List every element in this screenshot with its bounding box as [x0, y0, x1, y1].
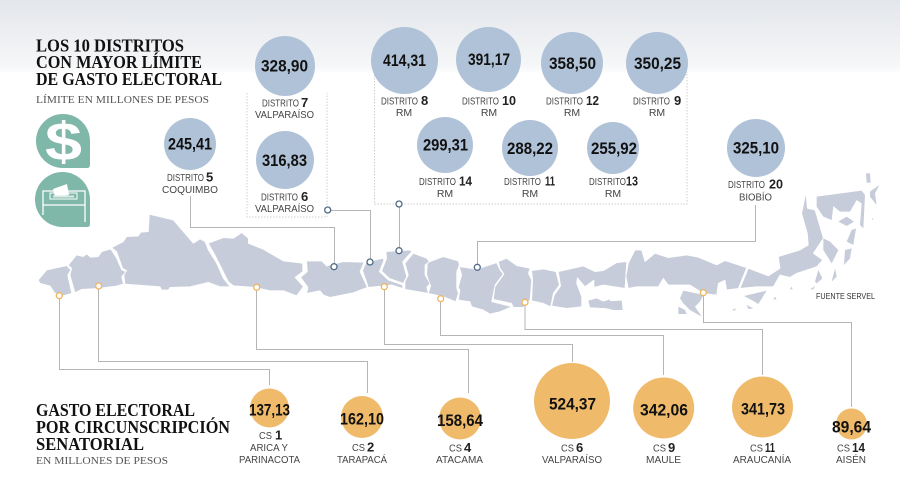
bubble: CS 11 [732, 376, 793, 466]
icon: dollar: $ [45, 112, 82, 172]
bubble: CS 9: MAULE [646, 454, 681, 466]
bubble: CS 4: 158,64 [437, 411, 483, 430]
bubble: district 14: 14 [459, 174, 473, 188]
bubble: district 20: BIOBÍO [739, 190, 772, 204]
bubble: CS 14: 89,64 [832, 418, 871, 436]
title: top [36, 36, 222, 89]
bubble: CS 2: CS [352, 442, 365, 454]
title: bottom: POR CIRCUNSCRIPCIÓN [36, 416, 230, 437]
bubble: CS 11: 11 [765, 440, 775, 455]
bubble: district 11: RM [522, 188, 538, 200]
bubble: district 6 [255, 131, 314, 215]
bubble: district 9 [626, 32, 688, 119]
bubble: CS 1: CS [259, 430, 272, 442]
title: bottom: SENATORIAL [36, 434, 144, 454]
bubble: district 9: DISTRITO [633, 96, 670, 108]
map of districts [38, 173, 879, 317]
source note: FUENTE SERVEL [816, 292, 875, 301]
bubble: CS 6: 524,37 [549, 394, 596, 414]
bubble: district 7: 7 [301, 95, 308, 110]
bubble: district 14: RM [437, 188, 453, 200]
subtitle: bottom: EN MILLONES DE PESOS [36, 455, 168, 467]
bubble: district 9: 9 [674, 93, 681, 108]
bubble: district 10: 10 [502, 93, 516, 108]
icon: ballot box [35, 172, 90, 227]
bubble: CS 4: CS [449, 442, 462, 454]
bubble: district 14: DISTRITO [419, 176, 456, 188]
bubble: district 13: 13 [626, 174, 638, 188]
leader lines for districts [190, 196, 756, 267]
bubble: CS 1: PARINACOTA [239, 454, 300, 466]
bubble: district 9: 350,25 [634, 54, 681, 73]
bubble: CS 11: 341,73 [741, 400, 785, 418]
bubble: CS 11: ARAUCANÍA [733, 453, 791, 466]
bubble: district 5 [162, 118, 218, 196]
bubble: CS 6 [534, 363, 610, 466]
bubble: district 20: DISTRITO [728, 179, 765, 191]
bubble: district 10: RM [481, 107, 497, 119]
bubble: district 7: DISTRITO [262, 98, 299, 110]
bubble: district 12: DISTRITO [546, 96, 583, 108]
bubble: district 11: DISTRITO [504, 176, 541, 188]
bubble: district 14 [417, 117, 473, 200]
bubble: district 12 [541, 32, 603, 119]
bubble: CS 2: 2 [367, 440, 374, 454]
bubble: CS 14: CS [837, 442, 850, 454]
bubble: district 8: RM [396, 107, 412, 119]
bubble: CS 1: 137,13 [249, 400, 290, 420]
title: top: LOS 10 DISTRITOS [36, 36, 184, 56]
bubble: district 6: 6 [301, 189, 308, 204]
bubble: CS 6: 6 [576, 440, 583, 455]
bubble: district 11 [502, 120, 558, 200]
bubble: CS 14 [832, 408, 871, 466]
bubble: district 13: 255,92 [591, 139, 637, 158]
bubble: district 12: 358,50 [549, 54, 596, 73]
bubble: CS 1: ARICA Y [250, 442, 288, 454]
map markers [56, 201, 706, 305]
bubble: CS 14: AISÉN [836, 453, 866, 466]
title: bottom [36, 400, 230, 454]
bubble: district 8: DISTRITO [381, 96, 418, 108]
bubble: district 5: COQUIMBO [162, 184, 218, 196]
icon: dollar [36, 112, 90, 172]
bubble: district 13 [587, 122, 639, 200]
bubble: CS 14: 14 [852, 440, 866, 455]
bubble: CS 1 [239, 388, 300, 466]
bubble: CS 9: 9 [668, 440, 675, 455]
bubble: district 10 [456, 27, 521, 119]
bubble: CS 2 [337, 396, 387, 466]
title: top: DE GASTO ELECTORAL [36, 69, 222, 89]
title: top: CON MAYOR LÍMITE [36, 51, 202, 72]
bubble: district 13: RM [605, 188, 621, 200]
bubble: CS 6: VALPARAÍSO [542, 453, 602, 466]
bubble: CS 9 [633, 378, 694, 466]
bubble: district 8 [371, 27, 438, 119]
bubble: district 8: 8 [421, 93, 428, 108]
bubble: CS 6: CS [561, 442, 574, 454]
bubble: district 9: RM [649, 107, 665, 119]
bubble: district 20: 325,10 [733, 138, 779, 158]
bubble: district 6: 316,83 [262, 151, 307, 170]
bubble: district 5: 5 [206, 170, 213, 184]
bubble: district 8: 414,31 [383, 51, 426, 70]
leader lines for senate constituencies [60, 286, 852, 407]
bubble: district 7 [255, 36, 315, 121]
bubble: district 6: DISTRITO [261, 192, 298, 204]
bubble: district 5: DISTRITO [167, 172, 204, 184]
bubble: district 7: 328,90 [261, 56, 308, 76]
bubble: district 20: 20 [769, 176, 783, 192]
bubble: CS 9: 342,06 [640, 400, 688, 420]
bubble: CS 4: 4 [464, 440, 472, 455]
bubble: district 7: VALPARAÍSO [255, 108, 314, 121]
bubble: CS 11: CS [750, 442, 763, 454]
bubble: CS 2: 162,10 [340, 410, 384, 428]
bubble: CS 1: 1 [275, 428, 282, 442]
bubble: CS 4: ATACAMA [436, 454, 483, 466]
bubble: district 12: RM [564, 107, 580, 119]
bubble: district 10: DISTRITO [462, 96, 499, 108]
bubble: district 13: DISTRITO [589, 176, 626, 188]
bubble: district 11: 11 [545, 174, 555, 188]
bubble: district 12: 12 [586, 93, 599, 108]
title: bottom: GASTO ELECTORAL [36, 400, 195, 420]
bubble: district 5: 245,41 [168, 134, 212, 154]
subtitle: top: LÍMITE EN MILLONES DE PESOS [36, 94, 209, 106]
bubble: district 11: 288,22 [507, 139, 553, 158]
bubble: CS 4 [436, 398, 483, 466]
district group boxes [247, 72, 687, 217]
bubble: CS 2: TARAPACÁ [337, 453, 387, 466]
bubble: district 6: VALPARAÍSO [255, 202, 314, 215]
bubble: district 20 [727, 119, 785, 204]
bubble: CS 9: CS [653, 442, 666, 454]
bubble: district 10: 391,17 [468, 50, 510, 69]
bubble: district 14: 299,31 [423, 136, 468, 154]
